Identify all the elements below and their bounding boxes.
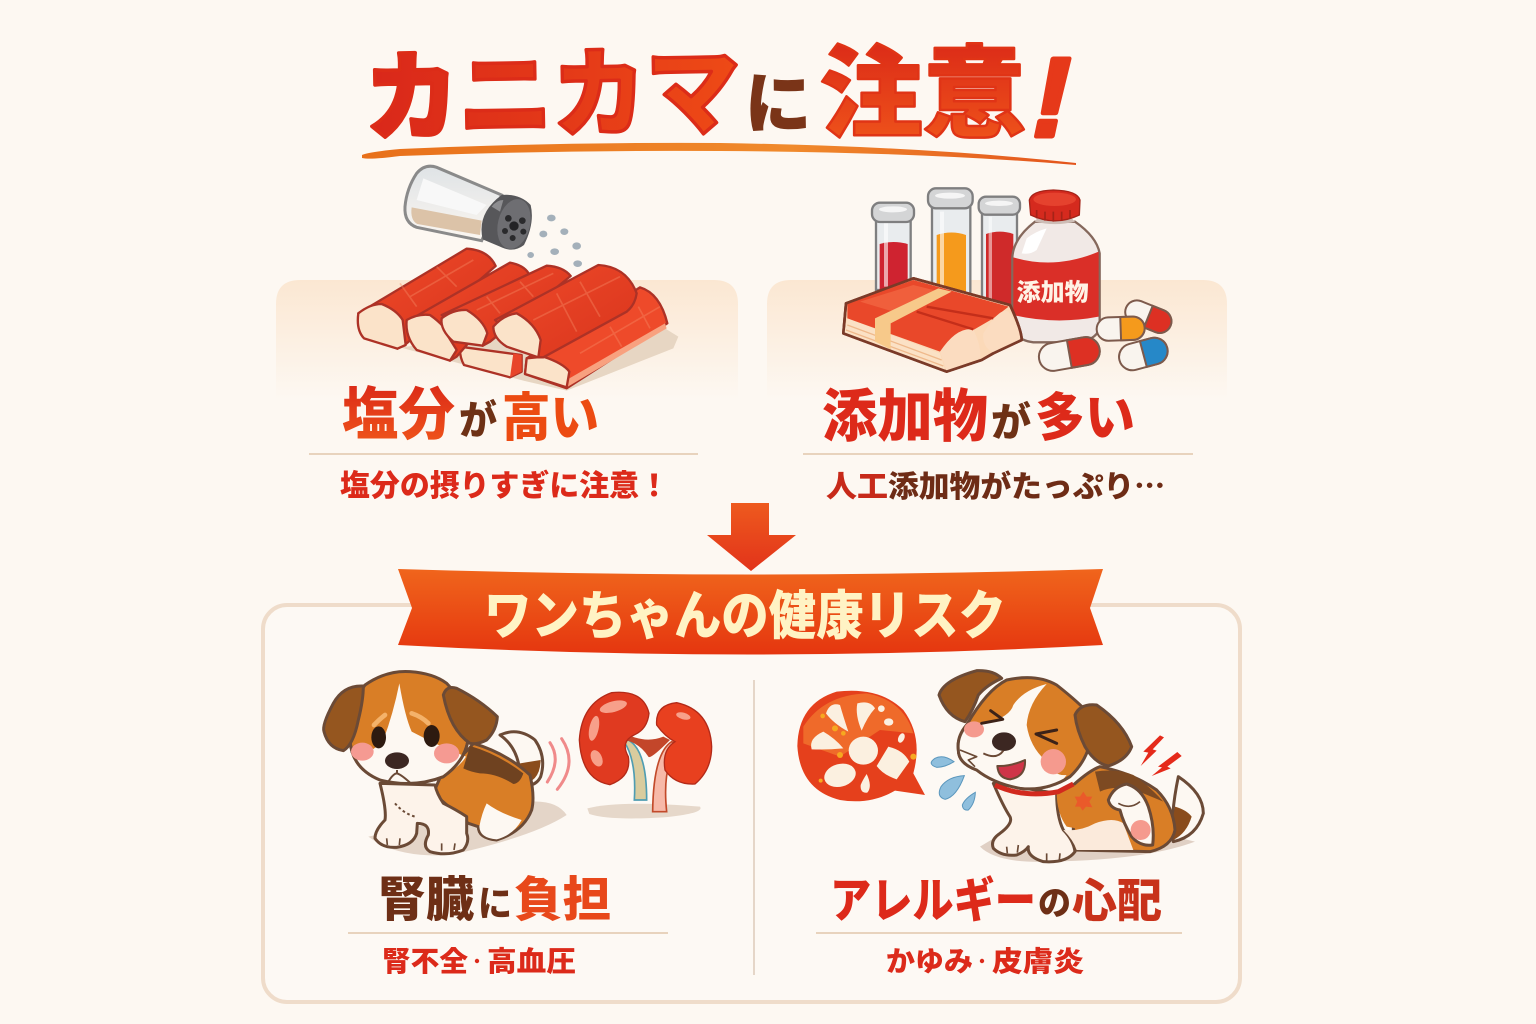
heading: allergy concern: 心配 <box>1072 875 1162 927</box>
text: allergy note: かゆみ <box>886 946 973 977</box>
heading: high salt: 塩分 <box>342 383 455 447</box>
icon: crab stick pack <box>843 278 1022 372</box>
illustration: sad dog and kidneys <box>324 671 712 855</box>
heading: many additives <box>822 385 1135 449</box>
heading: allergy concern: の <box>1038 885 1071 923</box>
icon: additive bottle <box>1012 190 1100 342</box>
icon: sneezing dog <box>939 671 1203 862</box>
icon: kidneys <box>579 692 712 818</box>
text: additives note: 添加物がたっぷり… <box>888 462 1165 506</box>
heading: many additives: 添加物 <box>822 385 988 449</box>
heading: many additives: が <box>991 400 1031 445</box>
icon: pills <box>1037 297 1175 373</box>
text: kidney note: 高血圧 <box>487 946 576 977</box>
text: salt note: 塩分の摂りすぎに注意！ <box>340 469 669 503</box>
title underline <box>362 143 1076 165</box>
icon: pain waves <box>547 739 569 789</box>
divider: vertical <box>753 680 755 975</box>
heading: allergy concern: アレルギー <box>830 875 1036 928</box>
icon: sneeze droplets <box>931 757 975 810</box>
icon: sad dog <box>324 671 567 855</box>
title: 注意 <box>820 39 1026 151</box>
panel: salt background <box>276 280 738 400</box>
icon: salt grains <box>527 215 582 267</box>
panel: health risks frame <box>263 605 1240 1002</box>
text: kidney note <box>382 946 576 977</box>
title <box>364 34 1085 160</box>
heading: kidney burden <box>378 874 611 927</box>
heading: many additives: 多い <box>1035 390 1135 448</box>
heading: high salt: 高い <box>502 390 599 448</box>
divider: allergy <box>816 932 1182 934</box>
icon: pain sparks <box>1141 735 1182 776</box>
text: additives note: 人工 <box>826 471 888 504</box>
heading: high salt <box>342 383 599 448</box>
divider: salt <box>309 453 698 455</box>
banner <box>398 569 1103 654</box>
icon: salt shaker and crab sticks <box>358 166 678 391</box>
icon: allergy speech bubble <box>797 691 925 801</box>
icon: additive bottle: 添加物 <box>1017 280 1089 307</box>
divider: additives <box>803 453 1193 455</box>
panel: additives background <box>767 280 1227 400</box>
text: allergy note <box>886 946 1084 977</box>
icon: salt shaker <box>405 166 536 252</box>
heading: high salt: が <box>459 398 497 443</box>
text: kidney note: 腎不全 <box>382 946 468 977</box>
icon: test tubes, bottle, crab pack and pills <box>843 188 1175 373</box>
arrow <box>707 503 796 571</box>
banner: ワンちゃんの健康リスク <box>484 587 1006 646</box>
title: ! <box>1021 34 1085 160</box>
title: に <box>745 67 811 141</box>
heading: kidney burden: 負担 <box>514 874 611 927</box>
heading: kidney burden: 腎臓 <box>378 874 474 927</box>
heading: kidney burden: に <box>478 883 512 924</box>
icon: test tubes <box>872 188 1020 307</box>
divider: kidney <box>348 932 668 934</box>
title: カニカマ <box>364 38 741 153</box>
icon: crab sticks <box>358 249 678 391</box>
illustration: allergy dog and bubble <box>797 671 1203 862</box>
text: allergy note: 皮膚炎 <box>992 946 1084 977</box>
